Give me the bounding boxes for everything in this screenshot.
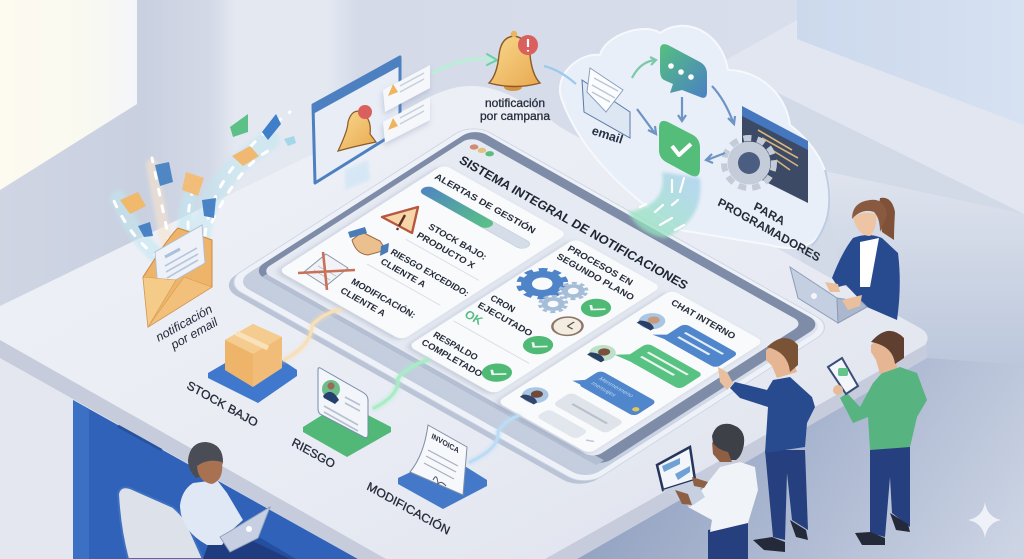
woman with laptop [790, 198, 900, 323]
desk [0, 86, 928, 559]
panel: alertas de gestión [278, 164, 567, 340]
invoice paper [410, 425, 467, 495]
base [303, 402, 391, 457]
wall panel top right [797, 0, 1024, 125]
badge [358, 105, 372, 119]
laptop [790, 267, 838, 323]
avatar 3 [516, 384, 554, 407]
heading: ALERTAS DE GESTIÓN [433, 171, 538, 236]
panel: procesos en segundo plano [408, 238, 661, 394]
icon: gear [724, 138, 774, 188]
backup text [416, 330, 500, 379]
backup text: RESPALDO [431, 330, 480, 362]
icon: sparkle [968, 502, 1001, 538]
envelope flaps [143, 277, 212, 327]
laptop [220, 507, 270, 552]
base [208, 344, 297, 403]
label: MODIFICACIÓN [365, 478, 453, 538]
arrow to campana bell [433, 54, 497, 73]
green bubble [614, 339, 703, 391]
ponytail [878, 198, 895, 240]
hair [852, 200, 887, 232]
label: notificación por campana: por campana [480, 109, 550, 123]
cloud with developer services [544, 26, 830, 265]
blue message bubble: mensajes [589, 381, 618, 398]
icon: check [575, 295, 617, 321]
heading: CHAT INTERNO [669, 298, 737, 341]
envelope notification por email with flying icons [110, 112, 296, 357]
blue bubble [652, 319, 739, 369]
icon: check [476, 360, 518, 386]
risk alert text: CLIENTE A [379, 257, 428, 290]
cron text: CRON [489, 293, 517, 314]
torso [180, 480, 243, 545]
cron text [456, 292, 550, 348]
head [871, 340, 897, 374]
modification alert text: CLIENTE A [339, 286, 388, 319]
blue message bubble [572, 367, 657, 417]
head [766, 345, 797, 378]
laptop [657, 447, 695, 490]
box [225, 324, 282, 387]
data streams [118, 140, 270, 262]
modification alert text [332, 276, 423, 328]
base [398, 455, 487, 509]
stock alert text: PRODUCTO X [415, 230, 477, 270]
pants [708, 522, 748, 559]
cron text: OK [462, 307, 486, 328]
icon: check tile [659, 121, 700, 176]
cloud arrows [632, 57, 735, 163]
icon: handshake [348, 227, 389, 256]
id card [318, 368, 368, 438]
avatar 2 [584, 342, 621, 364]
cron text: EJECUTADO [476, 300, 535, 338]
icon: warning [382, 207, 418, 233]
icon: chat [660, 44, 707, 98]
head [712, 424, 744, 460]
icon: check [517, 332, 559, 358]
face [853, 213, 876, 236]
heading: SEGUNDO PLANO [555, 251, 636, 302]
shoes [753, 520, 808, 552]
stock bajo item [185, 324, 297, 430]
stock alert text [410, 222, 493, 270]
label [153, 302, 222, 357]
blue cabinet under desk [73, 400, 358, 559]
icon: code window [742, 106, 808, 203]
label: para programadores: PARA [752, 199, 787, 229]
modificación item [365, 425, 487, 538]
blue message bubble: Menmenneno [596, 376, 636, 399]
backup text: COMPLETADO [420, 337, 484, 379]
flow arrows from items to tablet [284, 310, 518, 462]
legs [765, 450, 808, 540]
icon: bell [338, 111, 376, 151]
head [188, 442, 223, 478]
label: por email [168, 314, 221, 353]
envelope back [143, 228, 212, 327]
label: notificación por campana [480, 96, 550, 123]
progress bar [418, 185, 533, 250]
icon: floating tiles [120, 114, 296, 237]
torso [832, 235, 900, 320]
heading: PROCESOS EN [566, 243, 635, 287]
icon: email [582, 68, 630, 138]
legs [870, 443, 910, 537]
icon: notification bell [489, 31, 540, 91]
input bars [534, 392, 624, 446]
icon: gears [505, 263, 592, 315]
stream under window [345, 160, 370, 190]
label: notificación [153, 302, 215, 345]
label: email: email [590, 124, 625, 147]
hands [825, 282, 862, 310]
modification alert text: MODIFICACIÓN: [349, 276, 418, 320]
screen [261, 136, 804, 458]
risk alert text [372, 247, 475, 306]
label: para programadores: PROGRAMADORES [716, 195, 822, 265]
stock alert text: STOCK BAJO: [427, 222, 489, 262]
icon: crossed document [298, 252, 355, 290]
arrow into cloud [544, 66, 576, 84]
modificación item: INVOICA [430, 431, 461, 455]
chair [118, 487, 203, 559]
phone [828, 358, 858, 394]
label: STOCK BAJO [185, 378, 260, 430]
label: RIESGO [290, 435, 337, 471]
label: notificación por campana: notificación [485, 96, 545, 110]
avatar 1 [633, 310, 671, 333]
man in white shirt with laptop [657, 424, 758, 559]
cloud shape [560, 26, 830, 248]
seated person with laptop [118, 442, 290, 559]
icon: clock [546, 313, 589, 339]
hand [718, 367, 733, 390]
torso [688, 462, 758, 532]
risk alert text: RIESGO EXCEDIDO: [389, 247, 471, 298]
legs [203, 535, 290, 559]
letter [155, 225, 205, 290]
torso [840, 367, 927, 450]
heading [550, 243, 652, 302]
window buttons [468, 142, 496, 159]
shoes [855, 513, 910, 545]
tablet frame [219, 123, 834, 490]
browser window with bell [313, 57, 430, 183]
torso [730, 377, 815, 453]
title: SISTEMA INTEGRAL DE NOTIFICACIONES [457, 153, 691, 292]
riesgo item [290, 368, 391, 471]
cards [383, 65, 430, 143]
man in green sweater [828, 331, 927, 545]
floor and right shadow [0, 340, 1024, 559]
stream down to tablet [628, 172, 701, 238]
panel: chat interno [497, 290, 764, 454]
hand [833, 385, 843, 395]
hands [675, 477, 708, 505]
man in blue suit [718, 338, 815, 552]
